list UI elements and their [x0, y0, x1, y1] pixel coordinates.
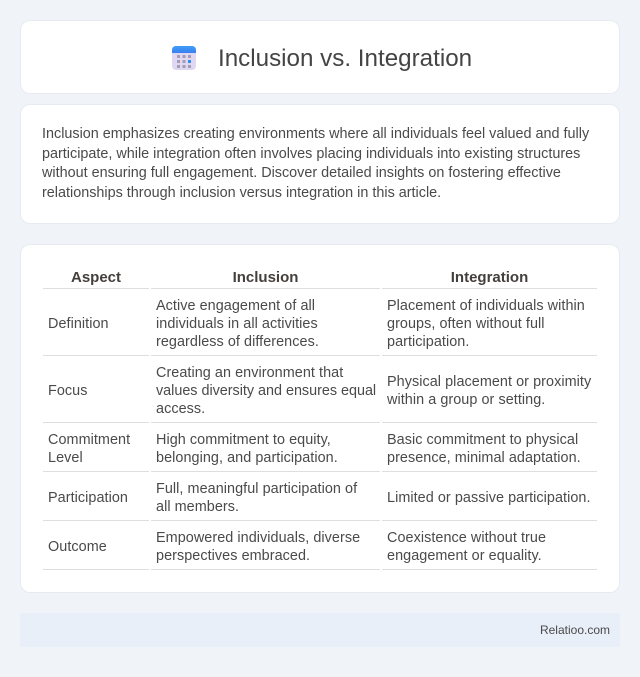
- table: Basic commitment to physical: [387, 432, 578, 448]
- row: commitment level: [48, 432, 130, 466]
- icon: calendar: [172, 46, 196, 70]
- intro paragraph: relationships through inclusion versus integration in this article.: [42, 184, 441, 200]
- row: commitment level: Level: [48, 450, 83, 466]
- table: Active engagement of all: [156, 298, 315, 314]
- table header: inclusion: Inclusion: [233, 269, 298, 286]
- table: within a group or setting.: [387, 392, 545, 408]
- title: Inclusion vs. Integration: [218, 45, 472, 72]
- table: belonging, and participation.: [156, 450, 338, 466]
- table: Physical placement or proximity: [387, 374, 591, 390]
- intro paragraph: participate, while integration often involves placing individuals into existing structures: [42, 146, 580, 162]
- table: perspectives embraced.: [156, 548, 310, 564]
- table: Empowered individuals, diverse: [156, 530, 360, 546]
- intro paragraph: [42, 126, 590, 200]
- row: participation: Participation: [48, 490, 128, 506]
- table: High commitment to equity,: [156, 432, 331, 448]
- table: values diversity and ensures equal: [156, 383, 376, 399]
- table: engagement or equality.: [387, 548, 542, 564]
- table: participation.: [387, 334, 469, 350]
- intro paragraph: Inclusion emphasizes creating environments where all individuals feel valued and fully: [42, 126, 589, 142]
- table: regardless of differences.: [156, 334, 319, 350]
- row: outcome: Outcome: [48, 539, 107, 555]
- table: groups, often without full: [387, 316, 545, 332]
- row: focus: Focus: [48, 383, 88, 399]
- table header: aspect: Aspect: [71, 269, 121, 286]
- table header: integration: Integration: [451, 269, 528, 286]
- intro paragraph: without ensuring full engagement. Discover detailed insights on fostering effective: [42, 165, 561, 181]
- footer credit: Relatioo.com: [540, 623, 610, 637]
- table: Limited or passive participation.: [387, 490, 591, 506]
- row: definition: Definition: [48, 316, 109, 332]
- table: Full, meaningful participation of: [156, 481, 357, 497]
- header card: [20, 20, 620, 94]
- comparison table panel: [20, 244, 620, 593]
- table: access.: [156, 401, 205, 417]
- table: presence, minimal adaptation.: [387, 450, 581, 466]
- table: individuals in all activities: [156, 316, 318, 332]
- table: all members.: [156, 499, 239, 515]
- intro text panel: [20, 104, 620, 224]
- table: Creating an environment that: [156, 365, 343, 381]
- row: commitment level: Commitment: [48, 432, 130, 448]
- table: Placement of individuals within: [387, 298, 585, 314]
- footer bar: [20, 613, 620, 647]
- table: Coexistence without true: [387, 530, 546, 546]
